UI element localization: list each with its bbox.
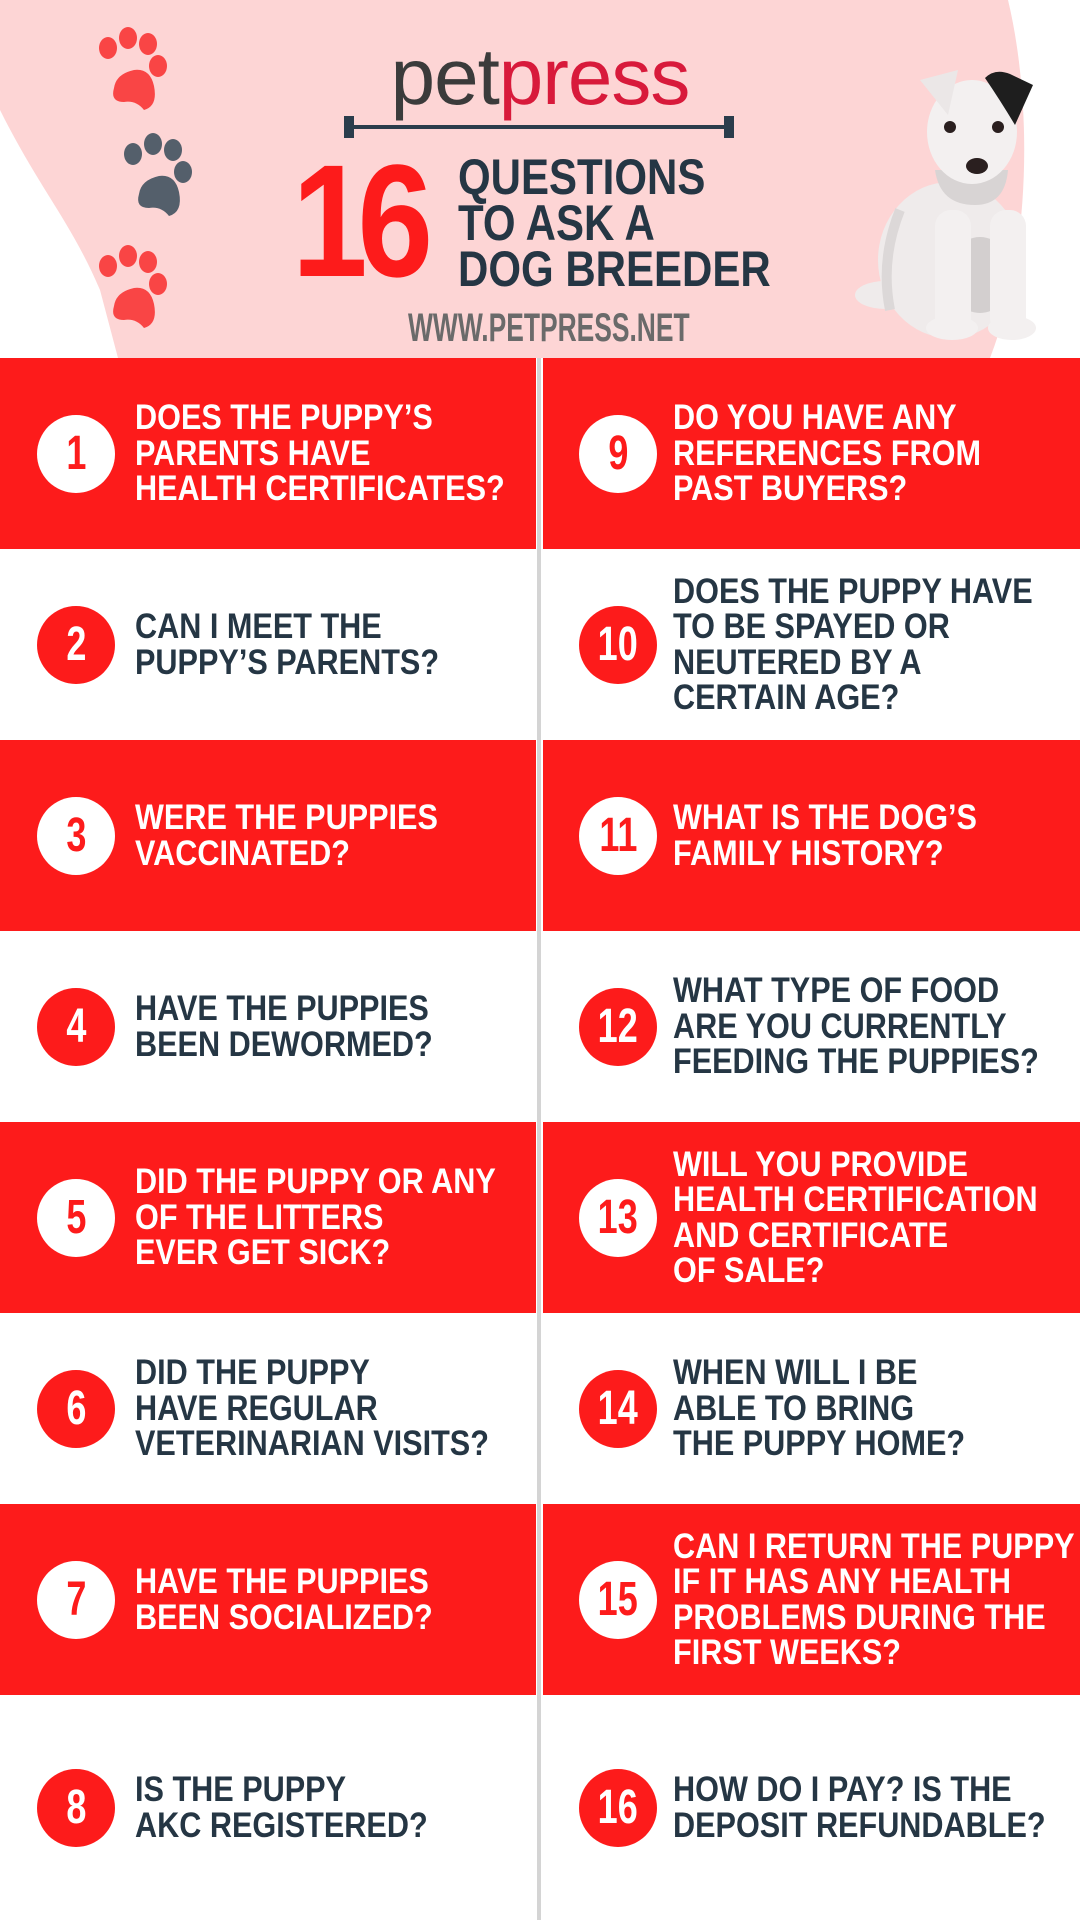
panel: question 14: 14 <box>598 1382 638 1435</box>
panel: question 15: 15 <box>598 1573 638 1626</box>
panel: question 15: IF IT HAS ANY HEALTH <box>673 1562 1011 1601</box>
panel: question 5: 5 <box>66 1191 86 1244</box>
panel: question 9 <box>543 358 1080 549</box>
panel: question 13: OF SALE? <box>673 1251 824 1290</box>
title text: DOG BREEDER <box>458 241 771 297</box>
panel: question 4: HAVE THE PUPPIES <box>135 989 429 1028</box>
panel: question 12: 12 <box>598 1000 638 1053</box>
panel: question 10: CERTAIN AGE? <box>673 678 899 717</box>
panel: question 14: ABLE TO BRING <box>673 1389 914 1428</box>
panel: question 10: 10 <box>598 618 638 671</box>
panel: question 3: VACCINATED? <box>135 834 350 872</box>
panel: question 3: WERE THE PUPPIES <box>135 798 438 837</box>
panel: question 7: HAVE THE PUPPIES <box>135 1562 429 1601</box>
panel: question 10: TO BE SPAYED OR <box>673 607 950 646</box>
panel: question 6: 6 <box>66 1382 86 1435</box>
panel: question 14: THE PUPPY HOME? <box>673 1424 965 1463</box>
panel: question 1: HEALTH CERTIFICATES? <box>135 469 505 508</box>
panel: question 16: 16 <box>598 1781 638 1834</box>
logo underline bar <box>344 116 734 138</box>
panel: question 3 <box>0 740 536 931</box>
panel: question 15: CAN I RETURN THE PUPPY <box>673 1526 1075 1566</box>
panel: question 12 <box>579 971 1039 1081</box>
panel: question 6 <box>37 1353 489 1463</box>
panel: question 11 <box>543 740 1080 931</box>
panel: question 10: NEUTERED BY A <box>673 642 921 682</box>
panel: question 8: IS THE PUPPY <box>135 1770 346 1809</box>
panel: question 16: HOW DO I PAY? IS THE <box>673 1770 1012 1809</box>
header background <box>0 0 1024 358</box>
panel: question 13: HEALTH CERTIFICATION <box>673 1180 1038 1219</box>
panel: question 8: 8 <box>66 1781 86 1834</box>
panel: question 11: FAMILY HISTORY? <box>673 834 944 872</box>
title text: QUESTIONS <box>458 149 705 205</box>
panel: question 1: DOES THE PUPPY’S <box>135 398 433 437</box>
panel: question 7: BEEN SOCIALIZED? <box>135 1598 433 1636</box>
panel: question 10 <box>579 572 1033 717</box>
panel: question 14: WHEN WILL I BE <box>673 1353 917 1392</box>
panel: question 1: 1 <box>66 427 86 480</box>
panel: question 14 <box>579 1353 965 1463</box>
panel: question 9: DO YOU HAVE ANY <box>673 398 957 437</box>
panel: question 12: ARE YOU CURRENTLY <box>673 1007 1007 1046</box>
title text <box>458 149 771 297</box>
panel: question 5: DID THE PUPPY OR ANY <box>135 1162 496 1201</box>
panel: question 15 <box>543 1504 1080 1695</box>
panel: question 2: 2 <box>66 618 86 671</box>
panel: question 7 <box>0 1504 536 1695</box>
panel: question 5: EVER GET SICK? <box>135 1233 390 1272</box>
panel: question 15: PROBLEMS DURING THE <box>673 1598 1046 1636</box>
panel: question 12: WHAT TYPE OF FOOD <box>673 971 999 1010</box>
panel: question 6: HAVE REGULAR <box>135 1389 378 1428</box>
panel: question 7: 7 <box>66 1573 86 1626</box>
panel: question 4: BEEN DEWORMED? <box>135 1024 433 1064</box>
panel: question 11: 11 <box>599 809 637 862</box>
panel: question 10: DOES THE PUPPY HAVE <box>673 572 1033 610</box>
panel: question 5 <box>0 1122 536 1313</box>
panel: question 5: OF THE LITTERS <box>135 1198 383 1237</box>
panel: question 8 <box>37 1769 428 1847</box>
center divider <box>537 358 541 1920</box>
panel: question 3: 3 <box>66 809 86 862</box>
panel: question 16: DEPOSIT REFUNDABLE? <box>673 1806 1046 1844</box>
title number 16: 16 <box>292 131 423 310</box>
title text: TO ASK A <box>458 195 655 251</box>
icon: dog illustration <box>855 70 1036 340</box>
panel: question 12: FEEDING THE PUPPIES? <box>673 1042 1039 1081</box>
panel: question 2: CAN I MEET THE <box>135 607 382 646</box>
panel: question 13: AND CERTIFICATE <box>673 1216 948 1254</box>
website url: WWW.PETPRESS.NET <box>408 306 690 350</box>
logo: petpress <box>391 32 689 121</box>
panel: question 6: DID THE PUPPY <box>135 1353 370 1392</box>
panel: question 11: WHAT IS THE DOG’S <box>673 798 977 837</box>
panel: question 6: VETERINARIAN VISITS? <box>135 1424 489 1463</box>
panel: question 13: 13 <box>598 1191 638 1244</box>
panel: question 1 <box>0 358 536 549</box>
panel: question 13 <box>543 1122 1080 1313</box>
panel: question 13: WILL YOU PROVIDE <box>673 1144 968 1184</box>
panel: question 4 <box>37 988 433 1066</box>
panel: question 9: PAST BUYERS? <box>673 469 907 508</box>
icon: paw red top <box>99 27 167 110</box>
panel: question 2 <box>37 606 439 684</box>
panel: question 1: PARENTS HAVE <box>135 434 370 473</box>
panel: question 16 <box>579 1769 1046 1847</box>
panel: question 9: REFERENCES FROM <box>673 434 981 473</box>
panel: question 8: AKC REGISTERED? <box>135 1806 428 1844</box>
panel: question 15: FIRST WEEKS? <box>673 1633 901 1672</box>
panel: question 9: 9 <box>608 427 628 480</box>
icon: paw gray <box>124 133 192 216</box>
panel: question 4: 4 <box>66 1000 86 1053</box>
icon: paw red bottom <box>99 245 167 328</box>
panel: question 2: PUPPY’S PARENTS? <box>135 642 439 682</box>
